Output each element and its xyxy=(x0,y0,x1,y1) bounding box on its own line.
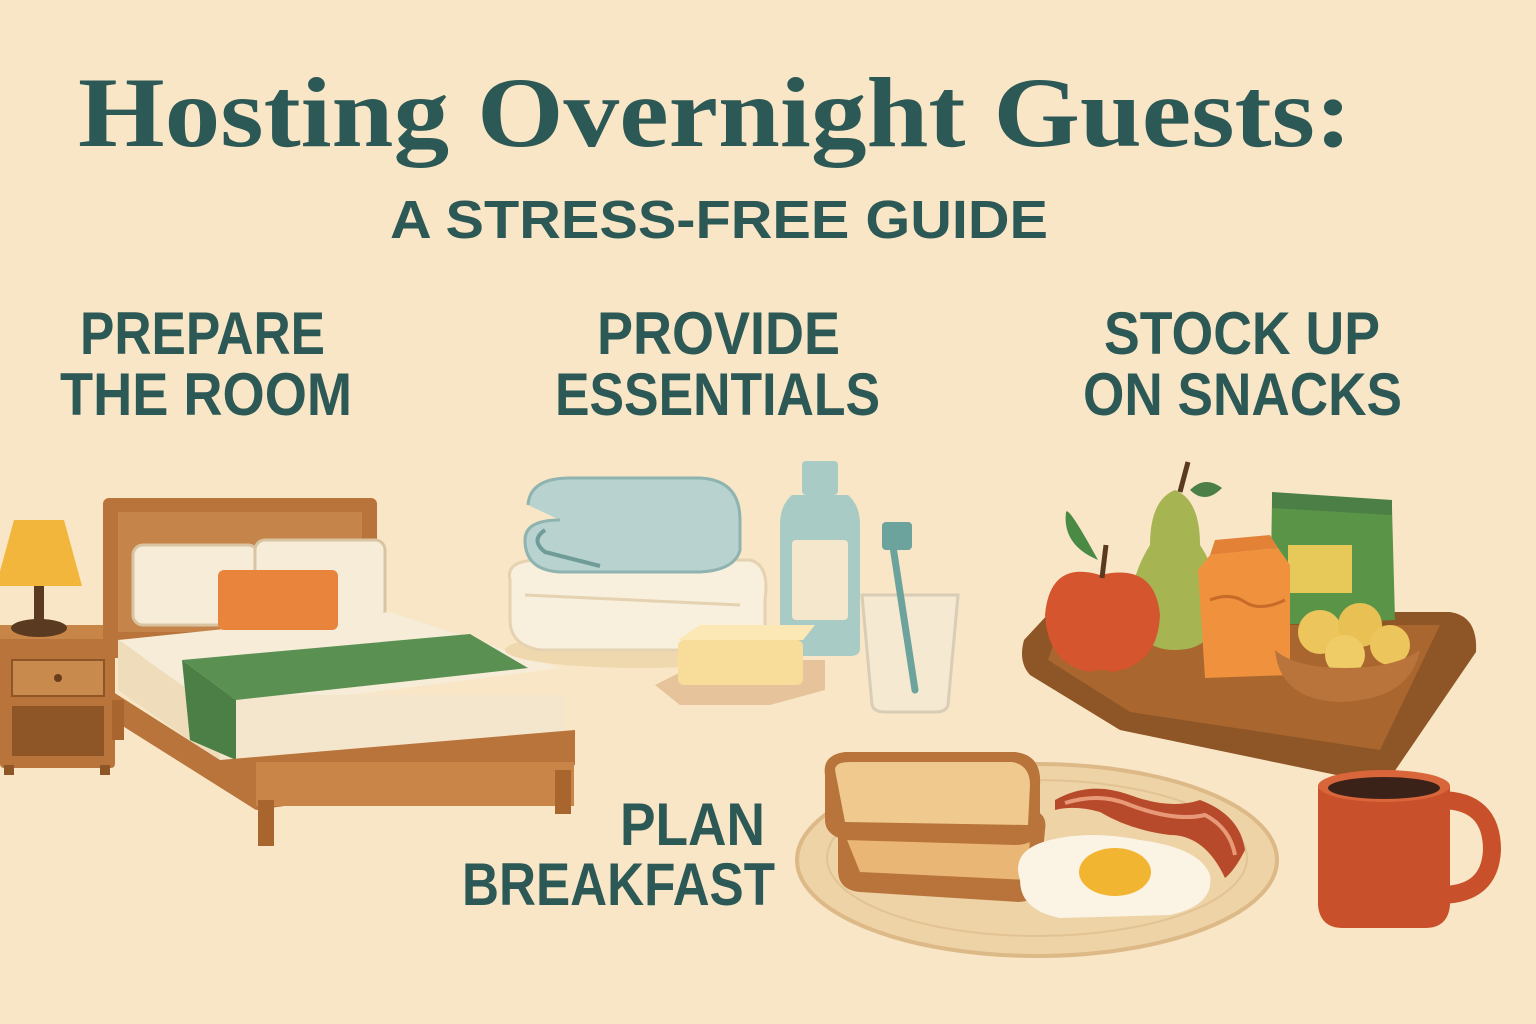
illustration: bed with lamp and nightstand xyxy=(0,498,575,846)
heading: stock up on snacks: STOCK UP xyxy=(1104,300,1380,367)
heading: provide essentials: ESSENTIALS xyxy=(555,361,880,428)
plate xyxy=(797,764,1277,956)
title: Hosting Overnight Guests: xyxy=(78,57,1352,168)
illustration: essentials xyxy=(505,461,958,712)
apple xyxy=(1045,511,1160,672)
illustration: breakfast plate xyxy=(797,752,1277,956)
egg xyxy=(1018,835,1210,918)
bed xyxy=(103,498,575,846)
towels xyxy=(505,478,775,668)
orange bag xyxy=(1198,535,1290,678)
subtitle: A STRESS-FREE GUIDE xyxy=(390,190,1048,250)
lamp xyxy=(0,520,82,637)
bottle xyxy=(780,461,860,656)
heading: prepare the room: THE ROOM xyxy=(60,361,352,428)
heading: stock up on snacks: ON SNACKS xyxy=(1083,361,1402,428)
green bag xyxy=(1270,492,1395,625)
toast xyxy=(825,752,1045,902)
tray xyxy=(1022,612,1476,782)
heading: stock up on snacks xyxy=(1083,300,1402,428)
bowl of snacks xyxy=(1275,603,1420,702)
icon: coffee mug xyxy=(1318,770,1492,928)
bacon xyxy=(1055,789,1245,878)
glass with toothbrush xyxy=(862,522,958,712)
heading: prepare the room xyxy=(60,300,352,428)
pear xyxy=(1131,462,1222,650)
heading: prepare the room: PREPARE xyxy=(80,300,325,367)
heading: plan breakfast: PLAN xyxy=(620,791,765,858)
illustration: snack tray xyxy=(1022,462,1476,782)
heading: provide essentials xyxy=(555,300,880,428)
heading: provide essentials: PROVIDE xyxy=(597,300,840,367)
nightstand xyxy=(0,625,115,775)
soap xyxy=(655,625,825,705)
heading: plan breakfast xyxy=(462,791,775,918)
heading: plan breakfast: BREAKFAST xyxy=(462,851,775,918)
